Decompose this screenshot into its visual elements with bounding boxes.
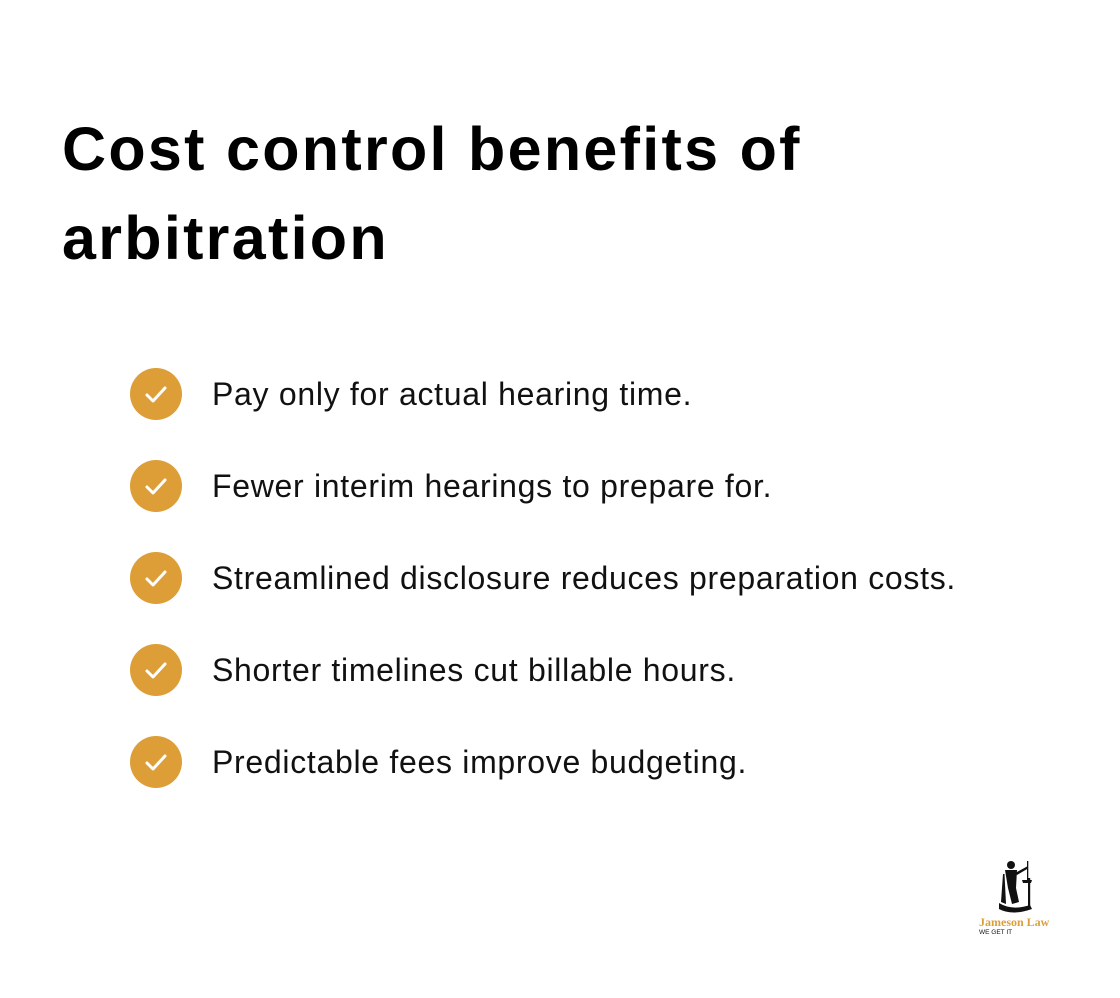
icon: check bbox=[130, 368, 182, 420]
title: arbitration bbox=[62, 204, 389, 272]
icon: check bbox=[130, 644, 182, 696]
title bbox=[62, 115, 802, 272]
item 1 bbox=[130, 368, 692, 420]
text: Predictable fees improve budgeting. bbox=[212, 744, 747, 780]
icon: check bbox=[130, 460, 182, 512]
item 4 bbox=[130, 644, 736, 696]
item 2 bbox=[130, 460, 772, 512]
text: Fewer interim hearings to prepare for. bbox=[212, 468, 772, 504]
text: Streamlined disclosure reduces preparation costs. bbox=[212, 560, 956, 596]
icon: check bbox=[130, 736, 182, 788]
logo: Jameson Law bbox=[979, 915, 1050, 929]
logo bbox=[979, 861, 1050, 936]
title: Cost control benefits of bbox=[62, 115, 802, 183]
item 3 bbox=[130, 552, 956, 604]
item 5 bbox=[130, 736, 747, 788]
text: Shorter timelines cut billable hours. bbox=[212, 652, 736, 688]
text: Pay only for actual hearing time. bbox=[212, 376, 692, 412]
logo: WE GET IT bbox=[979, 929, 1012, 936]
icon: check bbox=[130, 552, 182, 604]
